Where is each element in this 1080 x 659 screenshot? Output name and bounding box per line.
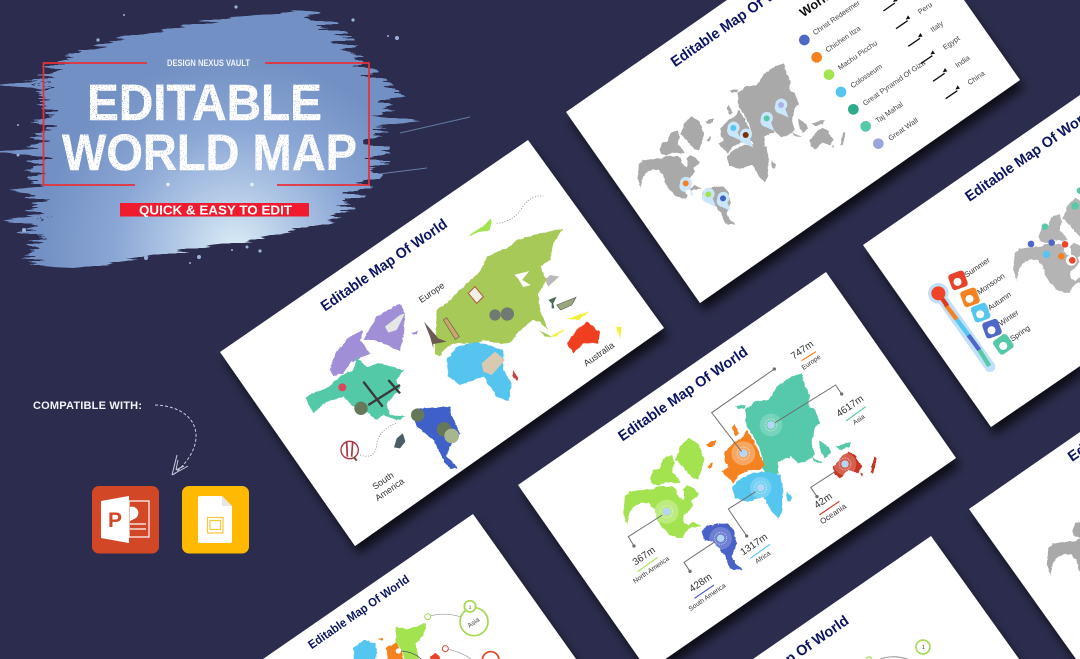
- icon: google slides: [182, 486, 249, 554]
- legend labels: [811, 0, 928, 143]
- stat: oceania: 42m: [812, 491, 835, 511]
- panel: slide bottom right, gray map: [969, 432, 1080, 659]
- leader lines: [628, 367, 843, 573]
- season labels: Spring: [1008, 323, 1032, 343]
- title: left slide: Editable Map Of World: [318, 216, 451, 315]
- icon: pyramid: [482, 352, 505, 375]
- stat: oceania: Oceania: [818, 501, 848, 526]
- dashed route: plane: [497, 196, 543, 223]
- season labels: Monsoon: [975, 271, 1006, 297]
- panel: slide center, population map: [518, 272, 956, 659]
- ring callouts: Asia: [466, 616, 481, 630]
- frame dots: [166, 183, 254, 186]
- ring callout: [866, 640, 948, 659]
- country labels: Egypt: [941, 34, 962, 52]
- main title: [62, 74, 357, 181]
- title: center slide: Editable Map Of World: [616, 344, 751, 445]
- icon: leaning tower: [443, 318, 459, 339]
- map: coloured continents: [623, 373, 877, 570]
- stat: north america: 367m: [631, 545, 658, 568]
- map dots: [1028, 187, 1080, 266]
- icon: hill trees: [354, 402, 459, 443]
- legend labels: Colosseum: [849, 62, 884, 90]
- season icons: [947, 270, 1015, 356]
- legend labels: Taj Mahal: [874, 100, 905, 125]
- stat: europe: [789, 339, 823, 372]
- legend dots: [799, 35, 884, 149]
- thermometer: [928, 283, 990, 367]
- icon: eiffel tower: [424, 322, 447, 348]
- ring callouts: [396, 601, 499, 659]
- country labels: [916, 0, 987, 87]
- icon: temple: [468, 287, 483, 303]
- legend labels: Great Wall: [886, 115, 920, 143]
- season labels: [963, 255, 1032, 343]
- stat: europe: 747m: [789, 339, 816, 362]
- arrows: [883, 0, 960, 99]
- map pins: [679, 99, 789, 211]
- main title: WORLD MAP: [62, 124, 357, 181]
- season labels: Autumn: [986, 290, 1013, 312]
- stat: south america: 428m: [688, 572, 714, 595]
- stat: south america: South America: [688, 582, 728, 613]
- icon: palm island: [557, 297, 576, 310]
- icon: powerpoint: [92, 486, 159, 554]
- stat: asia: 4617m: [835, 393, 866, 420]
- main title: EDITABLE: [87, 74, 322, 131]
- icon: mountain right: [545, 275, 559, 287]
- stat: oceania: [812, 491, 848, 526]
- icon: great ice: [385, 313, 405, 333]
- icon: pin: [338, 383, 346, 391]
- icon: balloon: [341, 441, 358, 461]
- stat: africa: 1317m: [739, 532, 770, 558]
- map: gray north america: [1013, 198, 1080, 293]
- season labels: Summer: [963, 255, 992, 279]
- icon: powerpoint: P: [108, 509, 122, 532]
- region labels: Europe: [417, 280, 446, 305]
- title: bottom left slide: Editable Map Of World: [305, 572, 412, 652]
- ring callouts: 1: [469, 604, 472, 609]
- icon: white grid tower: [515, 272, 530, 287]
- region labels: America: [373, 476, 406, 503]
- brush stroke banner: [0, 5, 470, 268]
- continent markers: [655, 414, 856, 550]
- panel: slide bottom left: [263, 514, 576, 659]
- stat: africa: Africa: [754, 550, 772, 565]
- country labels: Peru: [916, 0, 934, 16]
- stat: asia: Asia: [852, 413, 867, 427]
- map: gray partial: [1047, 493, 1080, 588]
- brush streaks: [347, 117, 470, 178]
- map: gray world: [638, 63, 845, 225]
- country labels: India: [953, 53, 972, 70]
- season labels: Winter: [997, 308, 1021, 328]
- compatible label: COMPATIBLE WITH:: [33, 400, 142, 412]
- icon: whale: [394, 433, 405, 448]
- legend labels: Chichen Itza: [824, 23, 863, 54]
- country labels: China: [966, 68, 987, 87]
- country labels: Italy: [929, 19, 945, 34]
- icon: plane: [469, 219, 492, 236]
- red frame: [44, 63, 369, 185]
- ring callout: 1: [922, 645, 925, 651]
- panel: slide left, illustrated map: [220, 140, 664, 546]
- icon: palm tree: [548, 297, 557, 308]
- region labels: South: [370, 470, 395, 492]
- legend labels: Great Pyramid Of Giza: [861, 58, 928, 108]
- panel: slide bottom center: [717, 536, 1019, 659]
- panel: slide top, world wonders: [566, 0, 1020, 303]
- dashed arrow: [155, 405, 196, 475]
- red tagline bar: QUICK & EASY TO EDIT: [139, 204, 292, 218]
- map: illustrated continents: [306, 228, 622, 468]
- stat: europe: Europe: [801, 354, 823, 372]
- map: coloured partial: [353, 623, 440, 659]
- region labels: [370, 280, 616, 503]
- region labels: Australia: [582, 340, 616, 368]
- paint splatter: [16, 5, 399, 264]
- eyebrow text: DESIGN NEXUS VAULT: [167, 58, 250, 68]
- dashed route: balloon: [360, 423, 396, 456]
- stat: north america: North America: [632, 555, 671, 585]
- icon: golden gate bridge: [363, 380, 400, 407]
- icon: forest: [489, 307, 514, 321]
- panel: slide right, seasons: [863, 95, 1080, 427]
- legend labels: Machu Picchu: [836, 38, 879, 72]
